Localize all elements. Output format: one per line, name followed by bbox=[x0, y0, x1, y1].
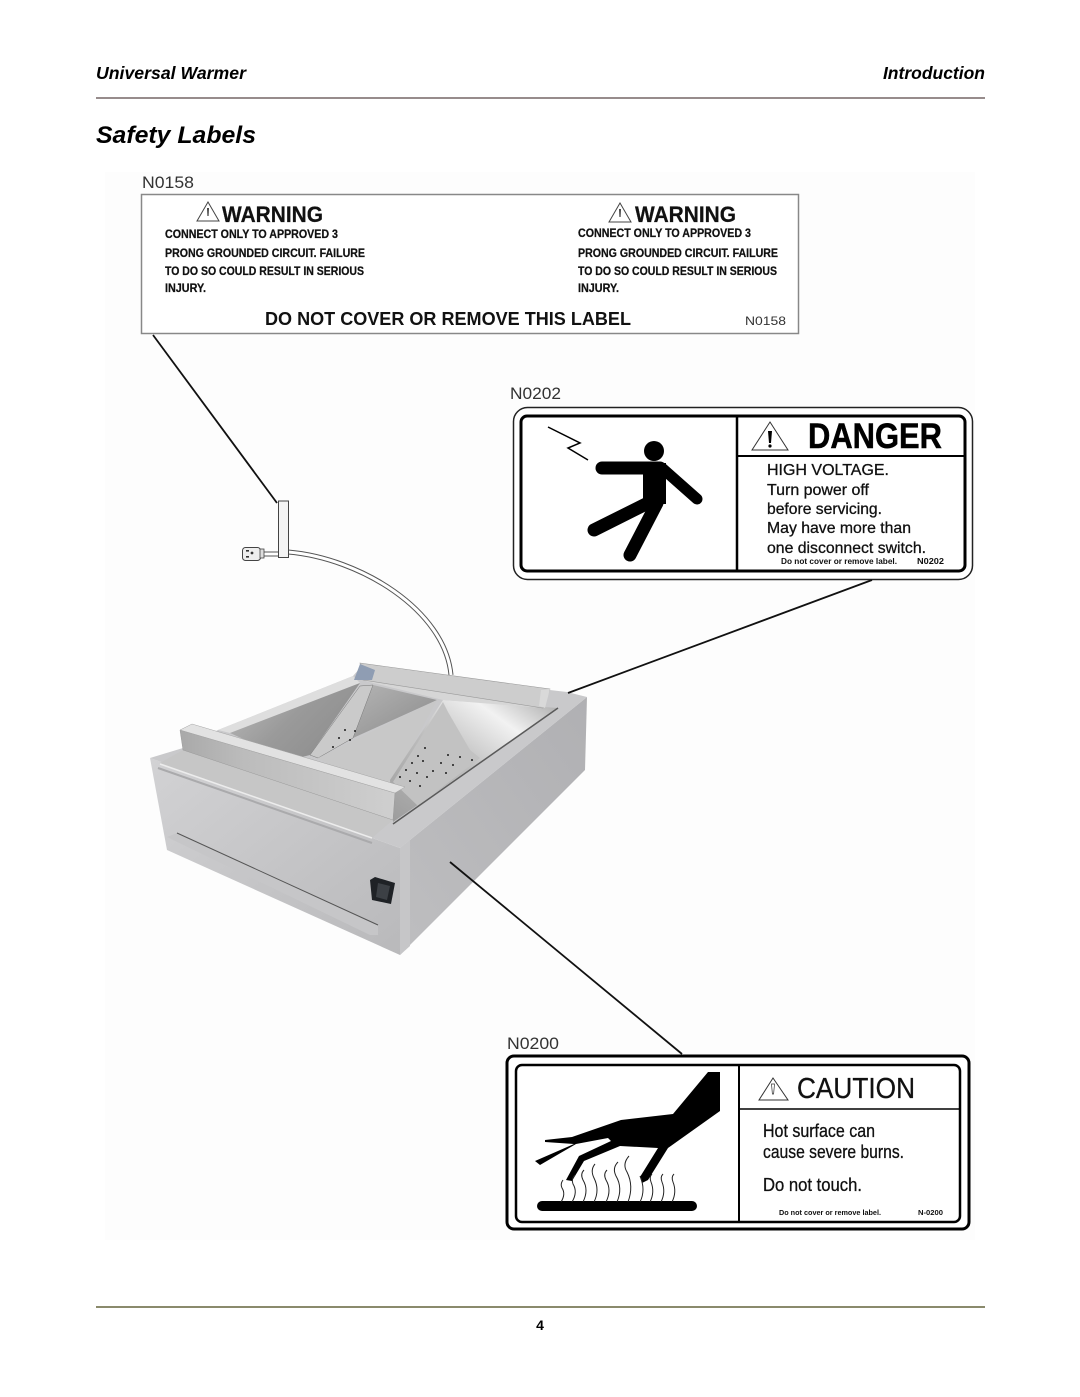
danger heading: DANGER bbox=[808, 417, 942, 456]
warning block left bbox=[165, 202, 365, 295]
ledge lip bbox=[160, 764, 372, 838]
caution heading: CAUTION bbox=[797, 1073, 915, 1105]
danger text: HIGH VOLTAGE. bbox=[767, 462, 889, 479]
label N0158: warning: N0158 bbox=[745, 314, 786, 328]
caution text: Hot surface can bbox=[763, 1121, 875, 1141]
warmer appliance bbox=[150, 663, 587, 955]
basin upper band bbox=[363, 680, 543, 708]
icon: electric shock figure bbox=[548, 427, 697, 555]
leader lines bbox=[153, 335, 872, 1054]
warning block left: CONNECT ONLY TO APPROVED 3 bbox=[165, 227, 338, 241]
caution text: Do not cover or remove label. bbox=[779, 1208, 881, 1217]
warning block right: PRONG GROUNDED CIRCUIT. FAILURE bbox=[578, 246, 778, 260]
warning block left: INJURY. bbox=[165, 281, 206, 295]
caution text: cause severe burns. bbox=[763, 1142, 904, 1162]
warning block right: TO DO SO COULD RESULT IN SERIOUS bbox=[578, 264, 777, 278]
warning block right: CONNECT ONLY TO APPROVED 3 bbox=[578, 226, 751, 240]
basin right panel bbox=[390, 700, 558, 822]
basin perforations bbox=[332, 729, 473, 787]
warmer front face bbox=[150, 758, 400, 955]
danger text: Turn power off bbox=[767, 482, 870, 499]
basin left panel bbox=[230, 683, 360, 760]
label N0202: danger: N0202 bbox=[510, 385, 561, 403]
perforated floor bbox=[393, 702, 480, 806]
title: Safety Labels bbox=[96, 122, 256, 149]
drawer slot bbox=[167, 833, 378, 935]
basin back panel bbox=[353, 685, 437, 738]
danger text: one disconnect switch. bbox=[767, 540, 926, 557]
danger text: May have more than bbox=[767, 520, 911, 537]
caution text: Do not touch. bbox=[763, 1175, 862, 1195]
warmer corner highlight bbox=[400, 840, 410, 955]
icon: hand over hot surface bbox=[535, 1072, 720, 1206]
danger text: Do not cover or remove label. bbox=[781, 557, 897, 566]
label N0202: danger bbox=[510, 385, 972, 580]
label N0200: caution: N0200 bbox=[507, 1035, 559, 1053]
warmer top rim bbox=[150, 668, 587, 848]
label N0200: caution bbox=[507, 1035, 969, 1229]
page header: Introduction bbox=[883, 63, 985, 83]
warmer side face bbox=[400, 697, 587, 955]
warning block left: PRONG GROUNDED CIRCUIT. FAILURE bbox=[165, 246, 365, 260]
page header bbox=[96, 63, 985, 99]
basin front edge bbox=[393, 708, 558, 824]
ledge lip shadow bbox=[158, 768, 372, 843]
label N0158: warning: N0158 bbox=[142, 174, 194, 192]
icon: power switch bbox=[370, 877, 395, 904]
back rail bbox=[360, 663, 550, 708]
do not cover notice: DO NOT COVER OR REMOVE THIS LABEL bbox=[265, 309, 631, 329]
basin left divider bbox=[310, 685, 373, 758]
danger heading bbox=[752, 417, 942, 456]
warning block left: WARNING bbox=[222, 202, 323, 227]
page header: Universal Warmer bbox=[96, 63, 247, 83]
danger text: N0202 bbox=[917, 557, 945, 566]
warning block left: TO DO SO COULD RESULT IN SERIOUS bbox=[165, 264, 364, 278]
front rail top bbox=[180, 724, 405, 793]
front ledge bbox=[160, 750, 393, 838]
danger text: before servicing. bbox=[767, 501, 882, 518]
warning block right: WARNING bbox=[635, 202, 736, 227]
power cord with plug and label flag bbox=[242, 501, 451, 675]
warning block right: INJURY. bbox=[578, 281, 619, 295]
label N0158: warning bbox=[142, 174, 798, 334]
basin center wedge bbox=[318, 700, 437, 790]
left rim highlight bbox=[218, 676, 360, 733]
page footer: 4 bbox=[536, 1317, 544, 1333]
caution text: N-0200 bbox=[918, 1208, 943, 1217]
front rail face bbox=[180, 730, 395, 820]
warning block right bbox=[578, 202, 778, 295]
danger text bbox=[767, 462, 945, 566]
caution text bbox=[763, 1121, 943, 1217]
